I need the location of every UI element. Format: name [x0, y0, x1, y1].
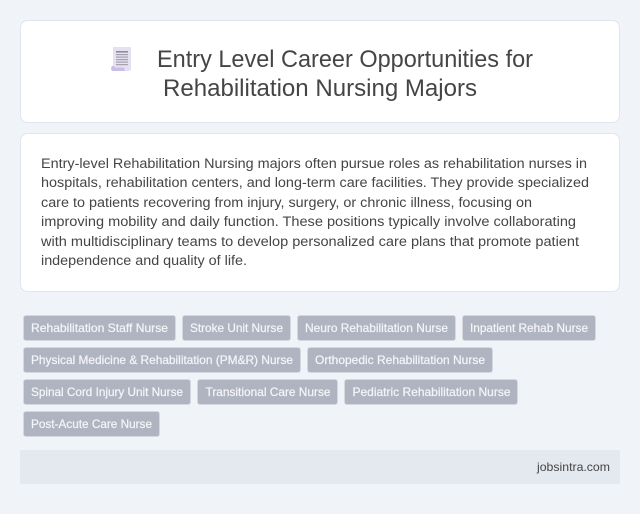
- panel: header: [20, 20, 620, 122]
- text block: description: care to patients recovering from injury, surgery, or chronic illness, focusing on: [41, 195, 532, 211]
- title: Entry Level Career Opportunities for: [157, 46, 533, 73]
- tag list: job roles: [24, 316, 596, 436]
- tag: Neuro Rehabilitation Nurse: Neuro Rehabilitation Nurse: [305, 321, 448, 335]
- tag: Rehabilitation Staff Nurse: Rehabilitation Staff Nurse: [31, 321, 168, 335]
- text block: description: [40, 156, 589, 269]
- panel: description: [20, 134, 620, 292]
- tag: Orthopedic Rehabilitation Nurse: Orthopedic Rehabilitation Nurse: [315, 353, 485, 367]
- tag: Pediatric Rehabilitation Nurse: Pediatric Rehabilitation Nurse: [352, 385, 511, 399]
- footer: [20, 450, 620, 484]
- tag: Rehabilitation Staff Nurse: [24, 316, 176, 340]
- tag: Spinal Cord Injury Unit Nurse: [24, 380, 190, 404]
- text block: description: hospitals, rehabilitation centers, and long-term care facilities. They provide specialized: [41, 175, 589, 191]
- tag: Inpatient Rehab Nurse: Inpatient Rehab Nurse: [470, 321, 588, 335]
- text block: description: improving mobility and daily function. These positions typically involve collaborating: [41, 214, 576, 230]
- tag: PM&R Nurse: Physical Medicine & Rehabilitation (PM&R) Nurse: [31, 353, 293, 367]
- tag: Transitional Care Nurse: [198, 380, 338, 404]
- tag: Stroke Unit Nurse: [182, 316, 290, 340]
- tag: Post-Acute Care Nurse: [24, 412, 160, 436]
- tag: Pediatric Rehabilitation Nurse: [344, 380, 518, 404]
- tag: Post-Acute Care Nurse: Post-Acute Care Nurse: [31, 417, 152, 431]
- tag: Spinal Cord Injury Unit Nurse: Spinal Cord Injury Unit Nurse: [31, 385, 183, 399]
- tag: Stroke Unit Nurse: Stroke Unit Nurse: [190, 321, 283, 335]
- text block: description: independence and quality of life.: [41, 253, 247, 269]
- text block: description: Entry-level Rehabilitation Nursing majors often pursue roles as rehabilitation nurses in: [41, 156, 587, 172]
- tag: Inpatient Rehab Nurse: [462, 316, 596, 340]
- icon: document scroll: [111, 47, 131, 71]
- title: [157, 46, 533, 102]
- tag: Neuro Rehabilitation Nurse: [298, 316, 456, 340]
- title: Rehabilitation Nursing Majors: [163, 75, 477, 102]
- tag: Orthopedic Rehabilitation Nurse: [308, 348, 492, 372]
- text block: description: with multidisciplinary teams to develop personalized care plans that promote patient: [40, 234, 579, 250]
- tag: PM&R Nurse: [24, 348, 300, 372]
- footer source text: jobsintra.com: [536, 460, 610, 474]
- tag: Transitional Care Nurse: Transitional Care Nurse: [206, 385, 331, 399]
